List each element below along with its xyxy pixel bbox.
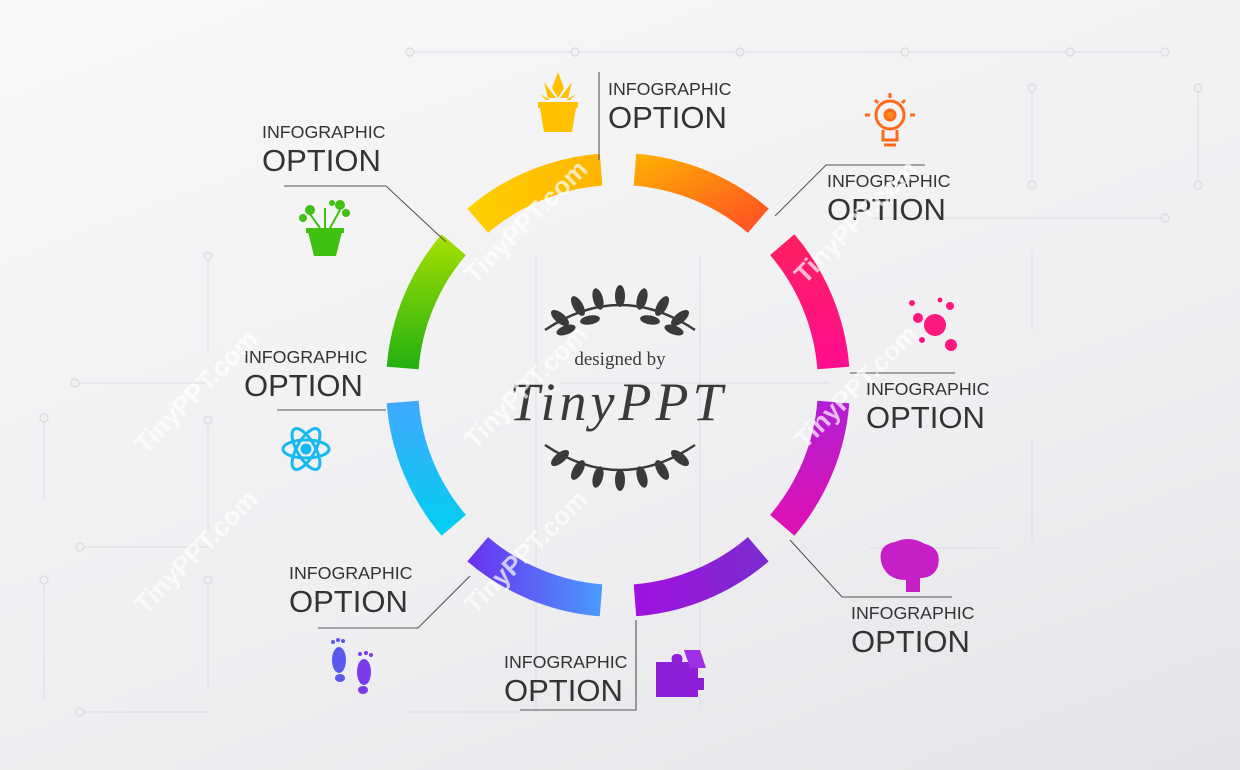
label: bottom: INFOGRAPHIC [504,652,628,672]
label: right: INFOGRAPHIC [866,379,990,399]
label: right-top: INFOGRAPHIC [827,171,950,191]
icon: succulent pot [538,72,578,132]
label: right-bottom: OPTION [851,624,970,659]
watermark: TinyPPT.com [128,484,263,619]
label: left: INFOGRAPHIC [244,347,368,367]
icon: atom [283,425,329,473]
icon: green plant [299,200,350,256]
label: bottom-left: OPTION [289,584,408,619]
watermark: TinyPPT.com [788,154,923,289]
icon: bubbles [909,298,957,351]
watermark: TinyPPT.com [458,154,593,289]
label: bottom-left [289,563,412,619]
label: right [866,379,990,435]
leaves bottom [545,445,695,470]
center logo: designed by [574,349,666,370]
icon: footprints [331,638,373,694]
label: bottom [504,652,628,708]
label: right-top: OPTION [827,192,946,227]
label: top: INFOGRAPHIC [608,79,732,99]
label: bottom-left: INFOGRAPHIC [289,563,412,583]
center logo: TinyPPT [509,372,727,432]
watermark: TinyPPT.com [458,319,593,454]
segment: cyan [387,401,466,536]
leaves top [545,305,695,330]
watermark: TinyPPT.com [128,324,263,459]
segment: blue [467,537,602,616]
label: right-top [827,171,950,227]
icon: brain [881,539,939,592]
segment: orange [634,154,769,233]
label: top-left: OPTION [262,143,381,178]
label: top [608,79,732,135]
label: top: OPTION [608,100,727,135]
label: right-bottom [851,603,974,659]
icon: light bulb [865,93,915,145]
label: left [244,347,368,403]
watermark: TinyPPT.com [458,484,593,619]
watermark: TinyPPT.com [788,319,923,454]
label: top-left: INFOGRAPHIC [262,122,386,142]
label: right: OPTION [866,400,985,435]
segment: green [387,234,466,369]
label: bottom: OPTION [504,673,623,708]
label: left: OPTION [244,368,363,403]
icon: puzzle [656,650,706,697]
label: top-left [262,122,386,178]
segment: yellow [467,154,602,233]
label: right-bottom: INFOGRAPHIC [851,603,974,623]
segment: pink [770,234,849,369]
segment: magenta [770,401,849,536]
segment: purple [634,537,769,616]
